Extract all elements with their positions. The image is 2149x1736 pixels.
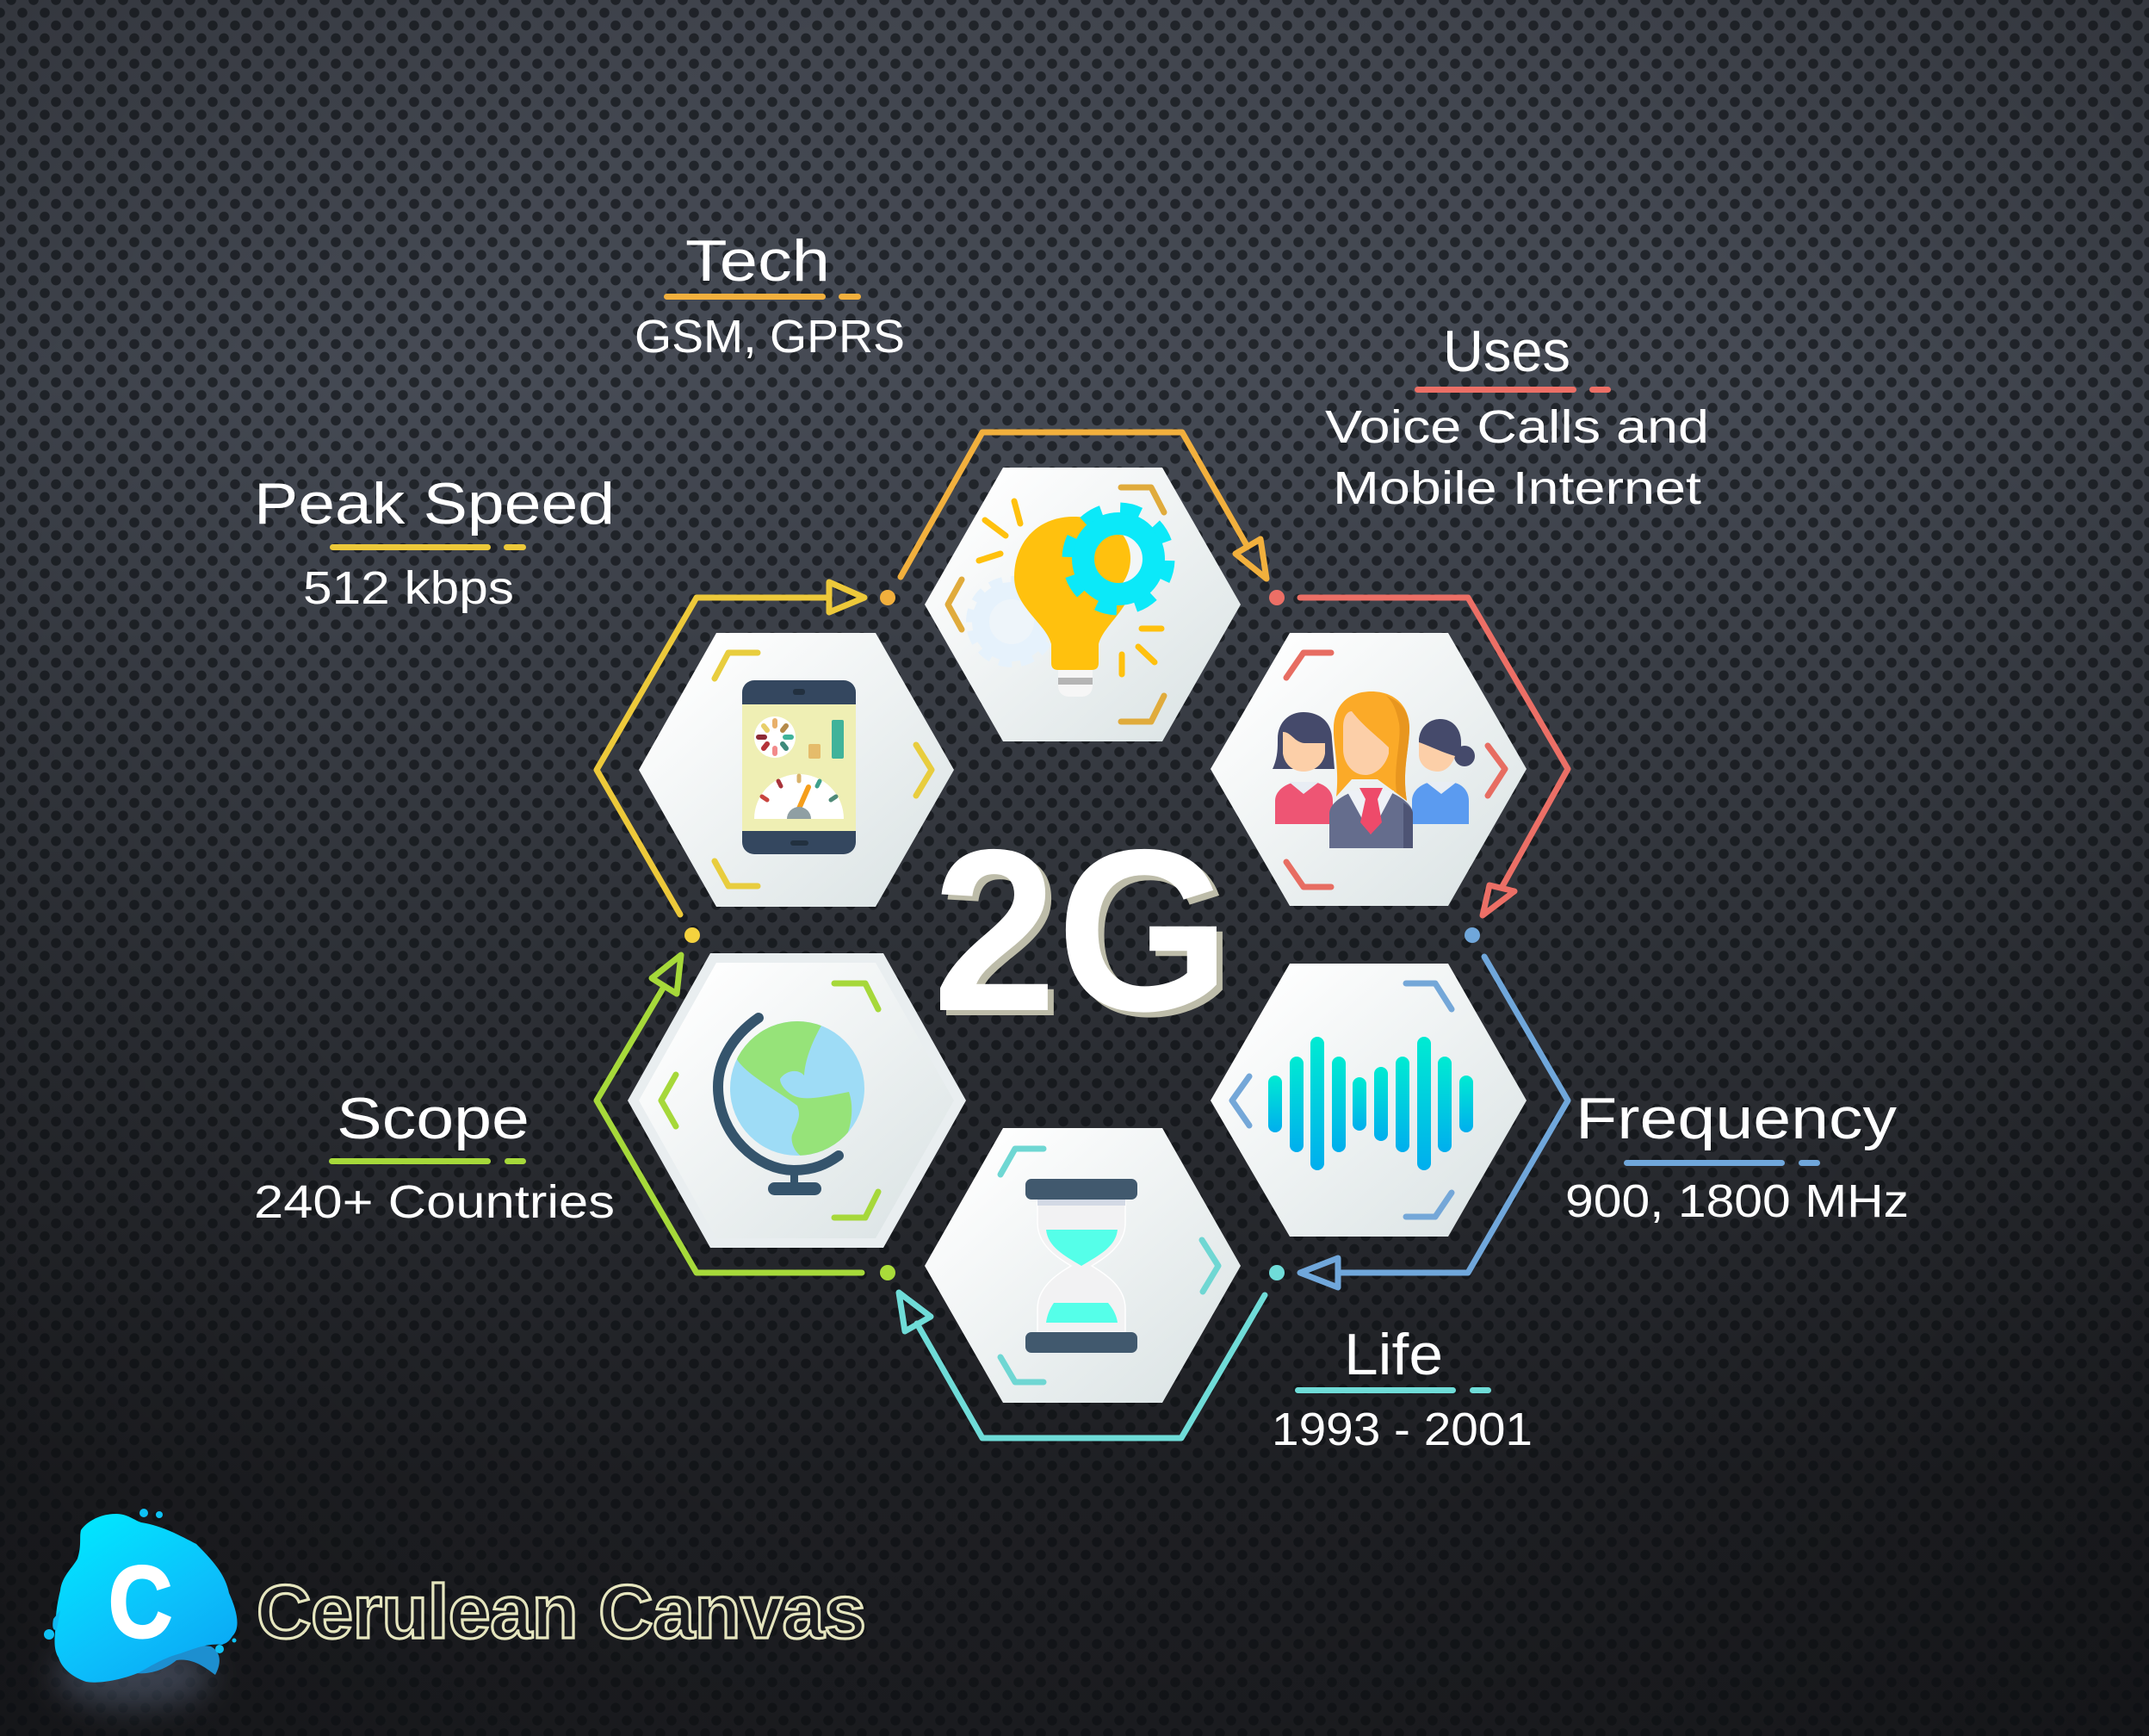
label: peak speed: Peak Speed xyxy=(254,471,615,536)
icon: three people xyxy=(1273,691,1475,848)
label: tech: GSM, GPRS xyxy=(635,311,905,363)
hexagon: uses xyxy=(1211,633,1527,906)
title: 2G: 2G xyxy=(938,806,1236,1064)
connector arrow: life to scope xyxy=(899,1265,1285,1438)
label: frequency xyxy=(1565,1086,1909,1227)
icon: lightbulb and gear xyxy=(970,501,1171,697)
icon: sound wave xyxy=(1268,1037,1473,1170)
label: frequency: 900, 1800 MHz xyxy=(1565,1175,1909,1227)
label: scope xyxy=(254,1086,615,1228)
title: 2G: 2G xyxy=(932,801,1230,1059)
hexagon: life xyxy=(925,1128,1241,1403)
hexagon: tech xyxy=(925,468,1241,741)
label: life: Life xyxy=(1344,1322,1443,1387)
hexagon: scope xyxy=(628,953,966,1248)
label: uses: Mobile Internet xyxy=(1333,462,1701,514)
logo icon: cerulean blob: C xyxy=(108,1546,172,1659)
label: peak speed xyxy=(254,471,615,614)
label: uses xyxy=(1325,319,1709,514)
connector arrow: uses to frequency xyxy=(1269,590,1568,915)
label: scope: Scope xyxy=(337,1086,530,1151)
label: frequency: Frequency xyxy=(1576,1086,1897,1151)
label: tech: Tech xyxy=(685,228,830,294)
icon: phone with gauges xyxy=(742,680,856,854)
connector arrow: peak speed to tech xyxy=(597,582,864,943)
label: uses: Uses xyxy=(1443,319,1570,384)
label: life: 1993 - 2001 xyxy=(1272,1404,1533,1455)
logo wordmark: Cerulean Canvas xyxy=(257,1569,866,1654)
label: uses: Voice Calls and xyxy=(1325,401,1709,453)
connector arrow: frequency to life xyxy=(1300,927,1568,1287)
hexagon: frequency xyxy=(1211,964,1527,1237)
icon: globe xyxy=(718,1012,864,1195)
label: peak speed: 512 kbps xyxy=(303,562,514,614)
icon: hourglass xyxy=(1025,1179,1137,1353)
label: tech xyxy=(635,228,905,363)
label: life xyxy=(1272,1322,1533,1455)
logo icon: cerulean blob xyxy=(44,1509,238,1706)
connector arrow: scope to peak speed xyxy=(597,955,895,1280)
label: scope: 240+ Countries xyxy=(254,1176,615,1228)
connector arrow: tech to uses xyxy=(880,432,1266,605)
hexagon: peak speed xyxy=(639,633,954,907)
